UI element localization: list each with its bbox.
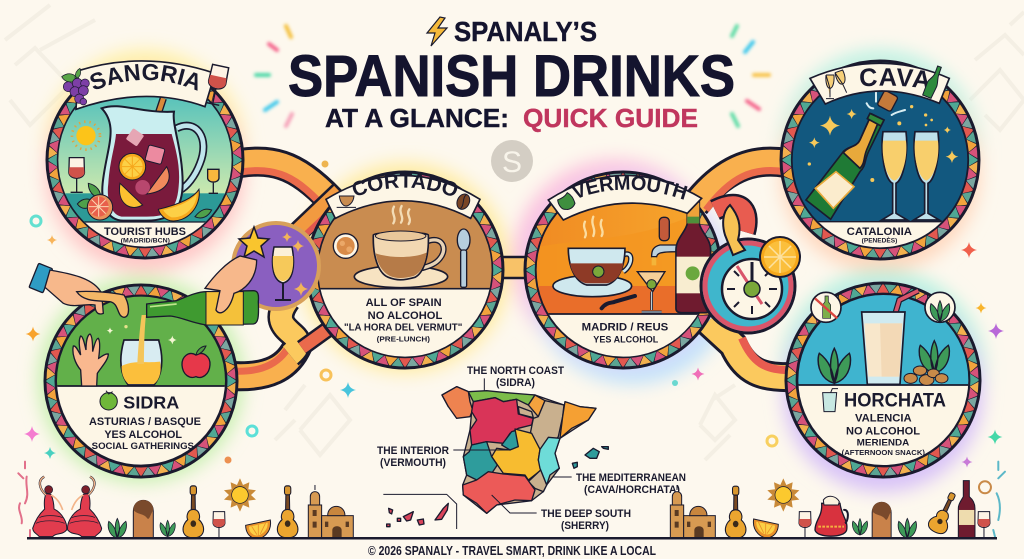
text: yes alcohol: YES ALCOHOL [104, 429, 182, 441]
icon: plant [898, 518, 916, 538]
icon: apple [182, 346, 210, 377]
icon: left wine glass [69, 158, 84, 192]
icon: vermouth cup and saucer [553, 248, 632, 297]
icon: horchata glass [862, 312, 905, 384]
region: galicia [442, 387, 473, 418]
icon: champagne flutes [882, 132, 939, 220]
icon: sun [224, 478, 256, 512]
text: spanaly's: SPANALY’S [454, 16, 597, 47]
icon: plant [108, 518, 126, 538]
icon: buildings [670, 485, 715, 538]
icon: green bottle [147, 291, 259, 325]
illustration: purple medallion with glass [233, 223, 319, 309]
ring: cava [768, 46, 992, 274]
icon: biscuit plate [333, 234, 358, 258]
region: valencia [538, 437, 560, 485]
text: all of spain: ALL OF SPAIN [366, 297, 442, 309]
icon: clinking glasses [826, 70, 847, 99]
label: north coast: (SIDRA) [496, 377, 535, 389]
icon: clock with orange slice [701, 205, 800, 333]
text: madrid reus: MADRID / REUS [582, 321, 669, 333]
icon: steam [584, 217, 603, 237]
ring: cortado [294, 157, 516, 383]
ribbon: vermouth to cava [695, 162, 786, 232]
label: deep south [541, 508, 631, 532]
label: mediterranean [576, 472, 686, 496]
icon: streamers [993, 462, 1005, 537]
ring: horchata [773, 268, 993, 492]
icon: cava bottle [806, 113, 884, 219]
banner: cortado [325, 174, 481, 220]
footer: © 2026 SPANALY - TRAVEL SMART, DRINK LIKE A LOCAL [368, 543, 656, 558]
logo: S circle [491, 140, 533, 182]
icon: tower [133, 500, 153, 538]
icon: guitar [725, 486, 746, 538]
icon: coffee cup and saucer [354, 231, 448, 288]
icon: gold sparkles [808, 105, 958, 182]
text: sidra: SIDRA [123, 392, 180, 412]
icon: steam [393, 206, 410, 224]
banner: sangria: SANGRIA [90, 64, 198, 91]
label: deep south: THE DEEP SOUTH [541, 508, 631, 520]
text: valencia: VALENCIA [855, 413, 912, 425]
banner: cortado: CORTADO [352, 174, 458, 196]
icon: sangria pitcher [102, 98, 203, 221]
region: castilla-la mancha [492, 429, 543, 480]
inset frame [383, 494, 457, 529]
text: tourist hubs: TOURIST HUBS [104, 226, 186, 238]
ground line [27, 537, 997, 540]
text: no alcohol: NO ALCOHOL [846, 425, 920, 437]
icon: sprig [160, 520, 175, 537]
panel: cortado [309, 170, 504, 370]
icon: guitar [277, 486, 298, 538]
bottom strip right [670, 462, 1005, 538]
ring: vermouth [512, 157, 734, 383]
region: murcia [528, 470, 547, 492]
icon: cuff [29, 263, 53, 293]
text: yes alcohol: YES ALCOHOL [593, 334, 659, 344]
logo: S circle: S [502, 146, 522, 179]
text: merienda: MERIENDA [857, 438, 910, 448]
icon: sidra glass [121, 315, 162, 385]
colored glows behind badges [38, 50, 985, 492]
icon: citrus and leaves [77, 183, 212, 221]
bottom strip left [18, 462, 353, 539]
icon: vermouth leaf [558, 193, 575, 209]
label: interior [377, 445, 449, 469]
panel: cava [780, 60, 980, 260]
icon: spoon [457, 229, 470, 287]
label: north coast: THE NORTH COAST [467, 365, 564, 377]
icon: orange slice [753, 519, 778, 538]
icon: small cup [823, 389, 838, 412]
text: afternoon snack: (AFTERNOON SNACK) [842, 448, 925, 457]
icon: wine glass [978, 512, 990, 538]
text: la hora del vermut: "LA HORA DEL VERMUT" [344, 323, 462, 334]
banner: cava [808, 62, 950, 105]
region: catalonia [560, 402, 596, 438]
label: mediterranean: (CAVA/HORCHATA) [584, 484, 680, 496]
icon: flamenco dancers [33, 477, 102, 537]
region: rioja [518, 407, 533, 418]
icon: coffee bean [454, 192, 472, 211]
text: pre-lunch: (PRE-LUNCH) [377, 334, 430, 343]
region: canary islands [387, 503, 448, 527]
icon: left plant [818, 348, 851, 383]
label: deep south: (SHERRY) [561, 520, 609, 532]
region: extremadura [463, 442, 497, 482]
icon: right hand [205, 256, 257, 313]
text: no alcohol: NO ALCOHOL [368, 310, 442, 322]
icon: apple small [100, 391, 117, 410]
ribbon: sangria to cortado [240, 162, 344, 236]
icon: vermouth tap [652, 217, 677, 265]
ring: sidra [32, 270, 250, 492]
icon: martini glass [637, 272, 665, 312]
icon: banner wine glass [204, 64, 229, 106]
icon: sun [767, 478, 799, 512]
icon: straw color [893, 291, 918, 323]
icon: wine glass [213, 512, 225, 538]
map of Spain [377, 365, 686, 532]
text: quick guide: QUICK GUIDE [523, 103, 698, 133]
icon: no-bottle badge [811, 292, 841, 322]
icon: tilted guitar [926, 489, 962, 536]
banner: vermouth [547, 174, 703, 221]
title block [288, 16, 735, 133]
panel: sidra [44, 284, 238, 478]
label: mediterranean: THE MEDITERRANEAN [576, 472, 686, 484]
region: balearics [572, 447, 608, 468]
icon: left hand [45, 270, 103, 314]
map silhouette underlay [442, 387, 596, 513]
illustration: hands pouring sidra [29, 256, 259, 325]
icon: straw [893, 291, 918, 323]
text: asturias basque: ASTURIAS / BASQUE [89, 416, 201, 428]
ribbon: sidra to cortado [232, 300, 338, 376]
icon: sprig [852, 519, 868, 535]
label: north coast [467, 365, 564, 389]
text: madrid barcelona: (MADRID/BCN) [121, 237, 170, 244]
icon: right glass [208, 169, 219, 193]
label: interior: (VERMOUTH) [380, 457, 446, 469]
icon: right plant [919, 341, 949, 373]
region: aragon [530, 401, 564, 449]
icon: small bottle [923, 66, 941, 98]
panel: sangria [46, 60, 244, 260]
banner: sangria [75, 60, 211, 110]
icon: streamers [18, 462, 30, 537]
icon: tiger nuts [904, 366, 948, 385]
icon: leaf badge [925, 292, 955, 322]
icon: sun [72, 122, 100, 150]
icon: lightning bolt [427, 17, 447, 46]
decorative sparkles and dots [24, 160, 1004, 468]
icon: amber pour [77, 291, 129, 317]
icon: wine bottle [958, 481, 975, 538]
panel: vermouth [524, 170, 720, 370]
icon: orange slice [246, 520, 271, 539]
icon: vermouth bottle [676, 202, 711, 313]
icon: spoon [602, 296, 635, 308]
region: north coast [468, 391, 535, 405]
text: social gatherings: SOCIAL GATHERINGS [92, 441, 194, 451]
connector: cortado to vermouth [498, 257, 531, 278]
ring: sangria [34, 47, 256, 273]
panel: horchata [784, 282, 982, 478]
icon: open hand [73, 334, 108, 386]
icon: cork and spray [867, 90, 905, 115]
confetti around title [256, 26, 769, 126]
region: madrid [502, 430, 518, 450]
banner: cava: CAVA [860, 68, 928, 88]
icon: sangria jug [815, 496, 848, 536]
region: andalusia [463, 472, 535, 513]
icon: sparkles [107, 325, 177, 344]
label: interior: THE INTERIOR [377, 445, 449, 457]
text: spanish drinks: SPANISH DRINKS [288, 44, 735, 109]
text: at a glance: AT A GLANCE: [325, 103, 509, 133]
banner: vermouth: VERMOUTH [572, 176, 688, 200]
region: castile and leon [470, 398, 533, 445]
icon: grapes [62, 68, 89, 105]
ribbon: vermouth to horchata [708, 322, 792, 377]
leader lines [453, 378, 572, 513]
icon: small cup [337, 196, 356, 207]
text: catalonia: CATALONIA [847, 226, 912, 238]
text: penedes: (PENEDÈS) [862, 236, 897, 245]
icon: guitar [183, 486, 204, 538]
icon: tower [872, 502, 891, 538]
icon: swirl [979, 481, 991, 493]
region: basque [528, 395, 545, 417]
text: horchata: HORCHATA [844, 391, 946, 412]
icon: buildings [308, 485, 353, 538]
icon: wine glass [799, 512, 811, 538]
